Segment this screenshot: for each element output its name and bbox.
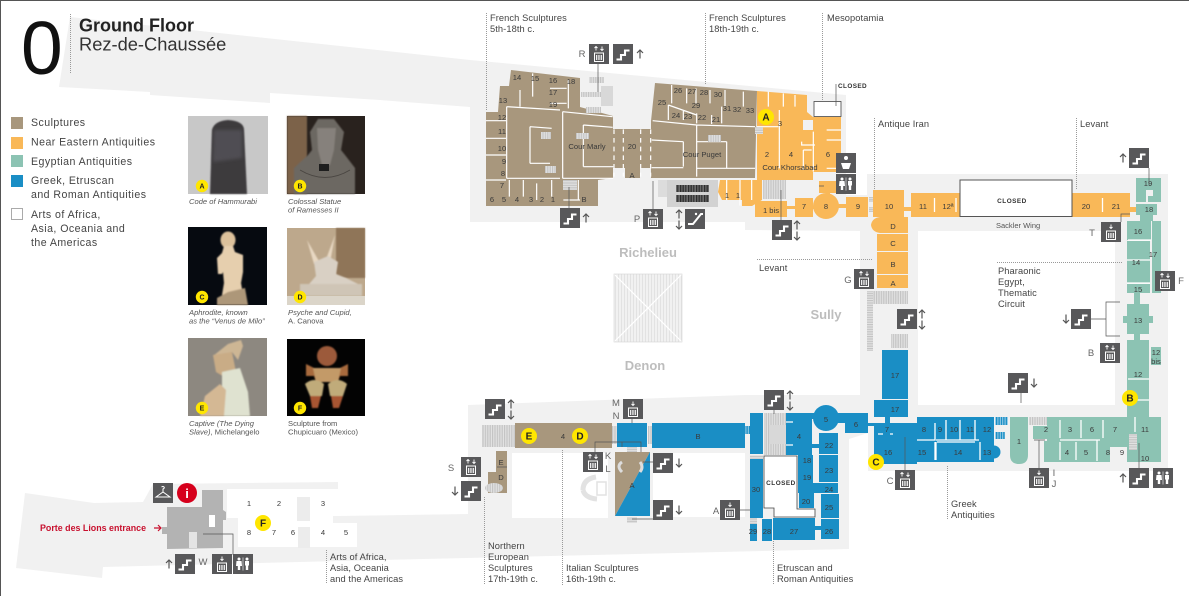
photo A: Code of Hammurabi: Code of Hammurabi (189, 197, 257, 206)
icons: lift S: S (448, 463, 454, 474)
near eastern rooms: 9 (856, 202, 860, 211)
denon sculpture rooms: D (498, 473, 504, 482)
highlights A to F: B (1126, 394, 1134, 404)
photo F: Chupicuaro sculpture: Sculpture from (288, 419, 337, 428)
denon sculpture rooms: A (629, 481, 635, 490)
egyptian rooms: 13 (1134, 316, 1142, 325)
label: pharaonic egypt: Pharaonic (998, 266, 1041, 276)
egyptian rooms: 3 (1068, 425, 1072, 434)
wing label: Denon: Denon (625, 358, 665, 373)
near eastern rooms: 2 (765, 150, 769, 159)
entrance building (162, 490, 226, 549)
africa rooms: 5 (344, 528, 348, 537)
label: mesopotamia: Mesopotamia (827, 13, 884, 23)
legend: greek (11, 175, 146, 201)
denon sculpture rooms: 4 (561, 432, 565, 441)
egyptian rooms: 2 (1044, 425, 1048, 434)
icons: stairs greek (1008, 373, 1037, 393)
entrance label: Porte des Lions entrance (40, 523, 146, 533)
label: french sculptures 18th-19th (706, 13, 786, 85)
photo E: Dying Slave (188, 338, 267, 436)
near eastern rooms: A (890, 279, 896, 288)
icons: lift F: F (1178, 276, 1184, 287)
label: pharaonic egypt: Egypt, (998, 277, 1025, 287)
legend (11, 117, 155, 249)
label: italian sculptures (562, 450, 639, 585)
richelieu sculpture rooms: 6 (490, 195, 494, 204)
icons: lift W (199, 554, 232, 574)
richelieu sculpture rooms: 4 (515, 195, 519, 204)
denon sculpture rooms: E (498, 458, 504, 467)
label: italian sculptures: Italian Sculptures (566, 563, 639, 573)
egyptian rooms: 11 (1141, 425, 1149, 434)
africa rooms: 6 (291, 528, 295, 537)
photo D: Psyche and Cupid: Psyche and Cupid, (288, 308, 352, 317)
richelieu sculpture rooms: A (629, 171, 635, 180)
label: closed mesopotamia (836, 83, 867, 106)
near eastern rooms: 12ª (942, 202, 954, 211)
richelieu sculpture rooms: 31 (723, 104, 731, 113)
richelieu sculpture rooms: 29 (692, 101, 700, 110)
icons: lift A (713, 500, 740, 520)
label: etruscan and roman (774, 541, 854, 584)
label: pharaonic egypt: Circuit (998, 299, 1025, 309)
greek etruscan roman rooms: 12 (983, 425, 991, 434)
egyptian rooms: 14 (1132, 258, 1140, 267)
icons: stairs north east (1120, 148, 1149, 168)
greek etruscan roman rooms: 20 (802, 497, 810, 506)
label: french sculptures 5th-18th (486, 13, 567, 110)
richelieu sculpture rooms: 20 (628, 142, 636, 151)
greek etruscan roman rooms: 25 (825, 503, 833, 512)
closed room: etruscan: CLOSED (766, 480, 796, 487)
greek etruscan roman rooms: 26 (825, 527, 833, 536)
label: levant west: Levant (759, 263, 788, 273)
label: arts of africa (326, 550, 403, 584)
icons: lifts R: R (579, 49, 586, 60)
legend: arts of africa: Arts of Africa, (31, 209, 101, 221)
richelieu sculpture rooms: 23 (684, 112, 692, 121)
greek etruscan roman rooms (612, 350, 1008, 541)
africa rooms: 2 (277, 499, 281, 508)
near eastern rooms: 21 (1112, 202, 1120, 211)
richelieu sculpture rooms: 2 (540, 195, 544, 204)
icons: lift B (1088, 343, 1120, 363)
greek etruscan roman rooms: 18 (803, 456, 811, 465)
egyptian rooms: 18 (1145, 205, 1153, 214)
egyptian rooms (1010, 178, 1161, 464)
greek etruscan roman rooms: 22 (825, 441, 833, 450)
near eastern rooms: C (890, 239, 896, 248)
legend: arts of africa: the Americas (31, 237, 98, 249)
egyptian rooms: 12 (1134, 370, 1142, 379)
photo B: Ramesses II (287, 116, 365, 214)
title: Ground Floor (79, 16, 194, 36)
photo B: Ramesses II: B (297, 184, 303, 190)
egyptian rooms: 15 (1134, 285, 1142, 294)
richelieu sculpture rooms: 16 (549, 76, 557, 85)
info icon (177, 483, 197, 503)
greek etruscan roman rooms: 16 (884, 448, 892, 457)
legend: greek: Greek, Etruscan (31, 175, 114, 187)
egyptian rooms: 10 (1141, 454, 1149, 463)
greek etruscan roman rooms: 11 (966, 425, 974, 434)
richelieu sculpture rooms: 15 (531, 74, 539, 83)
icons: lift P: P (634, 214, 640, 225)
near eastern rooms (718, 91, 1136, 288)
richelieu sculpture rooms: 18 (567, 77, 575, 86)
icons: toilets entrance (233, 554, 253, 574)
icons: lift G: G (844, 275, 852, 286)
label: french sculptures 18th-19th: 18th-19th c. (709, 24, 759, 34)
greek etruscan roman rooms: B (695, 432, 701, 441)
label: french sculptures 5th-18th: French Sculptures (490, 13, 567, 23)
icons: stairs egypt (1063, 309, 1091, 329)
richelieu sculpture rooms: 12 (498, 113, 506, 122)
icons: lift T: T (1089, 228, 1095, 239)
icons: lift B: B (1088, 348, 1094, 359)
greek etruscan roman rooms: 27 (790, 527, 798, 536)
richelieu sculpture rooms: 11 (498, 127, 506, 136)
closed room: sackler wing (960, 180, 1072, 216)
near eastern rooms: 7 (802, 202, 806, 211)
label: levant west (757, 260, 873, 273)
icons: lift K L: L (605, 464, 611, 475)
africa rooms: 3 (321, 499, 325, 508)
denon sculpture rooms (482, 423, 650, 523)
closed room: mesopotamia (814, 102, 841, 116)
photo D: Psyche and Cupid: D (297, 294, 303, 302)
photo D: Psyche and Cupid: A. Canova (288, 316, 324, 326)
icons: lift S (448, 457, 481, 477)
greek etruscan roman rooms: 10 (950, 425, 958, 434)
egyptian rooms: bis (1151, 357, 1161, 366)
icons: lift M N: N (613, 411, 620, 422)
legend: greek: and Roman Antiquities (31, 189, 146, 201)
icons: lift I J: J (1052, 479, 1057, 490)
richelieu stairs and escalators (563, 77, 786, 207)
label: northern european (484, 497, 538, 585)
richelieu sculpture rooms: 14 (513, 73, 521, 82)
icons: lift W: W (199, 557, 208, 568)
richelieu sculpture rooms: 32 (733, 105, 741, 114)
icons: stairs south east (1120, 468, 1149, 488)
title: Rez-de-Chaussée (79, 34, 226, 54)
richelieu sculpture rooms: 22 (698, 113, 706, 122)
near eastern rooms: 20 (1082, 202, 1090, 211)
label: northern european: Northern (488, 541, 525, 551)
icon: cloakroom (153, 483, 173, 503)
icons: lift M N (612, 398, 643, 422)
near eastern rooms: 10 (885, 202, 893, 211)
greek etruscan roman rooms: 17 (891, 371, 899, 380)
richelieu sculpture rooms: 19 (549, 100, 557, 109)
icons: stairs denon A lower (653, 500, 682, 520)
greek etruscan roman rooms: 8 (922, 425, 926, 434)
greek etruscan roman rooms: 7 (885, 425, 889, 434)
photo F: Chupicuaro sculpture: F (298, 406, 303, 412)
icons: stairs S (452, 481, 481, 501)
icons: lift P (634, 209, 663, 229)
label: pharaonic egypt: Thematic (998, 288, 1037, 298)
info icon: i (185, 486, 189, 501)
greek etruscan roman rooms: 6 (854, 420, 858, 429)
label: antique iran: Antique Iran (878, 119, 929, 129)
label: arts of africa: Arts of Africa, (330, 552, 386, 562)
richelieu sculpture rooms: Cour Marly (568, 142, 606, 151)
richelieu sculpture rooms: 24 (672, 111, 680, 120)
pyramid (614, 274, 682, 342)
photo E: Dying Slave: Captive (The Dying (189, 419, 255, 428)
egyptian rooms: 8 (1106, 448, 1110, 457)
wing label: Richelieu: Richelieu (619, 245, 677, 260)
greek etruscan roman rooms: 5 (824, 415, 828, 424)
label: pharaonic egypt (997, 262, 1123, 309)
richelieu sculpture rooms: 27 (688, 87, 696, 96)
richelieu sculpture rooms: 33 (746, 106, 754, 115)
egyptian rooms: 17 (1149, 250, 1157, 259)
photo C: Venus de Milo: as the “Venus de Milo” (189, 316, 265, 326)
richelieu sculpture rooms: 1 (551, 195, 555, 204)
icons: lift T (1089, 222, 1121, 242)
richelieu sculpture rooms: 9 (502, 157, 506, 166)
legend: arts of africa: Asia, Oceania and (31, 223, 125, 235)
floor number: 0 (21, 6, 63, 90)
legend: egyptian: Egyptian Antiquities (31, 156, 132, 168)
photo B: Ramesses II: Colossal Statue (288, 197, 341, 206)
richelieu sculpture rooms: 17 (549, 88, 557, 97)
label: etruscan and roman: Etruscan and (777, 563, 833, 573)
title divider (70, 14, 72, 74)
africa rooms: 7 (272, 528, 276, 537)
highlights A to F: E (526, 432, 533, 442)
richelieu sculpture rooms: 25 (658, 98, 666, 107)
label: levant north (1076, 118, 1109, 190)
richelieu sculpture rooms: 8 (501, 169, 505, 178)
egyptian rooms: 1 (1017, 437, 1021, 446)
greek etruscan roman rooms: 13 (983, 448, 991, 457)
greek etruscan roman rooms: 29 (749, 527, 757, 536)
near eastern rooms: 1 (736, 191, 740, 200)
richelieu sculpture rooms: 21 (712, 115, 720, 124)
egyptian rooms: 9 (1120, 448, 1124, 457)
icons: stairs R (613, 44, 643, 64)
near eastern rooms: 11 (919, 202, 927, 211)
legend: sculptures: Sculptures (31, 117, 86, 129)
icons: lift I J: I (1053, 468, 1055, 479)
icons: baby care (836, 153, 856, 173)
highlights A to F (255, 109, 1138, 531)
egyptian rooms: 7 (1113, 425, 1117, 434)
greek etruscan roman rooms: 23 (825, 466, 833, 475)
greek etruscan roman rooms: 19 (803, 473, 811, 482)
greek etruscan roman rooms: 15 (918, 448, 926, 457)
greek etruscan roman rooms: 28 (763, 527, 771, 536)
icons: lift A: A (713, 506, 720, 517)
near eastern rooms: 1 bis (763, 206, 779, 215)
near eastern rooms: D (890, 222, 896, 231)
connectors (203, 64, 1165, 555)
icons: lift C (887, 470, 915, 490)
icons: stairs 1 bis (772, 220, 800, 240)
near eastern rooms: Cour Khorsabad (762, 163, 818, 172)
icons: stairs west (560, 208, 589, 228)
label: closed mesopotamia: CLOSED (838, 83, 867, 90)
richelieu sculpture rooms: B (581, 195, 587, 204)
greek etruscan roman rooms: 4 (797, 432, 801, 441)
richelieu sculpture rooms: 10 (498, 144, 506, 153)
label: french sculptures 5th-18th: 5th-18th c. (490, 24, 535, 34)
photo F: Chupicuaro sculpture: Chupicuaro (Mexico) (288, 428, 359, 436)
near eastern rooms: 3 (778, 119, 782, 128)
label: greek antiquities (948, 466, 995, 520)
photo B: Ramesses II: of Ramesses II (288, 206, 340, 214)
entrance arrow (154, 525, 161, 531)
egyptian rooms: 16 (1134, 227, 1142, 236)
icons: stairs sully (897, 309, 925, 329)
richelieu sculpture rooms: 26 (674, 86, 682, 95)
label: levant north: Levant (1080, 119, 1109, 129)
photo D: Psyche and Cupid (287, 228, 365, 326)
label: greek antiquities: Antiquities (951, 510, 995, 520)
egyptian rooms: 6 (1090, 425, 1094, 434)
label: northern european: 17th-19th c. (488, 574, 538, 584)
highlights A to F: F (260, 518, 266, 530)
icons: stairs etruscan (764, 390, 793, 410)
grand staircase outline (583, 477, 606, 499)
africa rooms: 8 (247, 528, 251, 537)
legend: near eastern: Near Eastern Antiquities (31, 136, 155, 148)
sully stairs (867, 291, 908, 351)
label: arts of africa: and the Americas (330, 574, 403, 584)
icons: escalator (676, 209, 705, 229)
label: northern european: European (488, 552, 529, 562)
icons: stairs denon A upper (653, 453, 682, 473)
icons: lift I J (1029, 468, 1057, 490)
photo F: Chupicuaro sculpture (287, 339, 365, 436)
closed room: etruscan (764, 456, 815, 517)
title (79, 16, 226, 54)
near eastern rooms: 1 (725, 191, 729, 200)
photo C: Venus de Milo (188, 227, 267, 326)
photo A: Code of Hammurabi: A (199, 184, 205, 190)
richelieu sculpture rooms: 3 (529, 195, 533, 204)
egyptian rooms: 12 (1152, 348, 1160, 357)
photo A: Code of Hammurabi (188, 116, 268, 206)
richelieu sculpture rooms: 5 (502, 195, 506, 204)
label: northern european: Sculptures (488, 563, 533, 573)
greek etruscan roman rooms: 9 (938, 425, 942, 434)
icons: lift G (844, 269, 874, 289)
greek etruscan roman rooms: 14 (954, 448, 962, 457)
label: antique iran (874, 118, 929, 190)
richelieu sculpture rooms: 13 (499, 96, 507, 105)
africa rooms (227, 489, 357, 548)
icons: lift K L (583, 451, 612, 475)
icons: toilets south east (1153, 468, 1173, 488)
icons: stairs entrance (166, 554, 195, 574)
highlights A to F: C (872, 458, 880, 468)
photo C: Venus de Milo: C (199, 294, 205, 302)
icons: lift C: C (887, 476, 894, 487)
greek etruscan roman rooms: 17 (891, 405, 899, 414)
icons: lift M N: M (612, 398, 620, 409)
sackler wing label: Sackler Wing (996, 221, 1040, 230)
greek etruscan roman rooms: 24 (825, 485, 833, 494)
label: etruscan and roman: Roman Antiquities (777, 574, 854, 584)
highlights A to F: A (762, 112, 770, 124)
label: mesopotamia (822, 13, 884, 100)
icons: stairs denon west (485, 399, 514, 419)
egyptian rooms: 5 (1084, 448, 1088, 457)
label: arts of africa: Asia, Oceania (330, 563, 390, 573)
icons: toilets khorsabad (836, 174, 856, 194)
richelieu sculpture rooms: 28 (700, 88, 708, 97)
near eastern rooms: 6 (826, 150, 830, 159)
richelieu sculpture rooms: 30 (714, 90, 722, 99)
icons: lift F (1155, 271, 1184, 291)
icons: lift K L: K (605, 451, 612, 462)
africa rooms: 1 (247, 499, 251, 508)
photo C: Venus de Milo: Aphrodite, known (188, 308, 248, 317)
richelieu sculpture rooms (486, 70, 757, 206)
near eastern rooms: 8 (824, 202, 828, 211)
near eastern rooms: 4 (789, 150, 793, 159)
greek etruscan roman rooms: 30 (752, 485, 760, 494)
richelieu sculpture rooms: Cour Puget (683, 150, 722, 159)
label: french sculptures 18th-19th: French Sculptures (709, 13, 786, 23)
closed room: sackler wing: CLOSED (997, 198, 1027, 205)
label: italian sculptures: 16th-19th c. (566, 574, 616, 584)
africa rooms: 4 (321, 528, 325, 537)
photo E: Dying Slave: Slave), Michelangelo (189, 428, 260, 436)
wing label: Sully: Sully (810, 307, 842, 322)
egyptian rooms: 4 (1065, 448, 1069, 457)
highlights A to F: D (576, 432, 584, 442)
label: greek antiquities: Greek (951, 499, 977, 509)
richelieu sculpture rooms: 7 (500, 181, 504, 190)
egyptian rooms: 19 (1144, 179, 1152, 188)
near eastern rooms: B (890, 260, 896, 269)
legend: arts of africa (12, 208, 125, 249)
photo E: Dying Slave: E (200, 406, 205, 412)
icons: lifts R (579, 44, 609, 64)
